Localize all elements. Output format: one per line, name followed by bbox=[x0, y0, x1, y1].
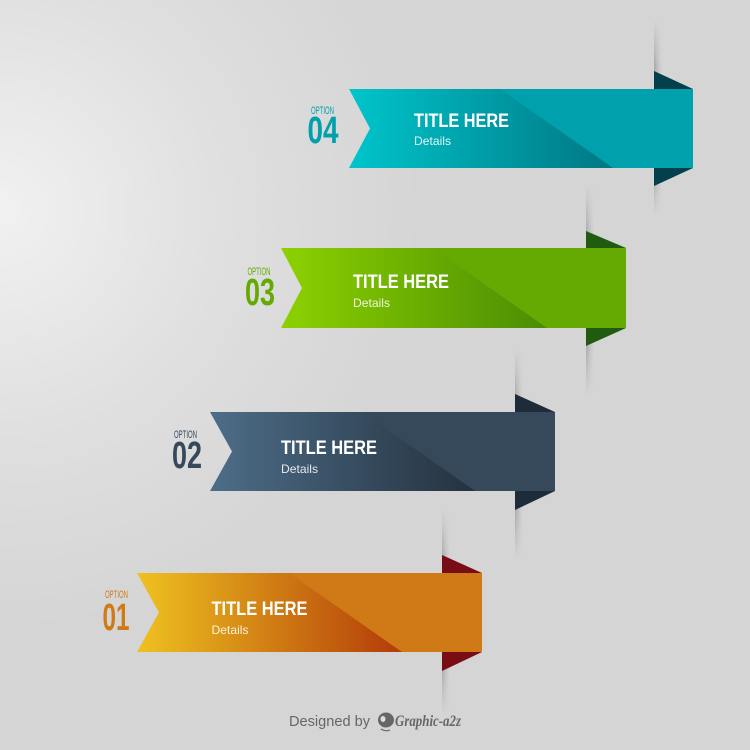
details 02: Details bbox=[281, 462, 318, 476]
ribbon: option 04 bbox=[308, 20, 693, 216]
number 02: 02 bbox=[172, 435, 202, 477]
band 02 bbox=[210, 412, 555, 491]
band 04 bbox=[349, 89, 693, 168]
band 01 bbox=[137, 573, 482, 652]
details 01: Details bbox=[212, 623, 248, 637]
top fold 01 bbox=[442, 555, 482, 573]
number 04: 04 bbox=[308, 110, 338, 152]
ribbon: option 02 bbox=[172, 350, 555, 560]
footer credit bbox=[289, 712, 462, 731]
bottom fold 03 bbox=[586, 328, 626, 346]
title 01: TITLE HERE bbox=[212, 598, 308, 620]
fold shadow 04 bbox=[654, 28, 660, 208]
band 03 bbox=[281, 248, 626, 328]
top fold 03 bbox=[586, 231, 626, 248]
title 02: TITLE HERE bbox=[281, 437, 377, 459]
top fold 02 bbox=[515, 394, 555, 412]
option label 01: OPTION bbox=[105, 589, 128, 601]
band overlay 03 bbox=[433, 248, 626, 328]
band overlay 01 bbox=[289, 573, 482, 652]
ribbon: option 01 bbox=[102, 510, 482, 715]
option label 04: OPTION bbox=[311, 105, 334, 117]
title 03: TITLE HERE bbox=[353, 271, 449, 293]
option label 02: OPTION bbox=[174, 429, 197, 441]
title 04: TITLE HERE bbox=[414, 110, 509, 132]
top fold 04 bbox=[654, 71, 693, 89]
details 03: Details bbox=[353, 296, 390, 310]
number 01: 01 bbox=[102, 597, 130, 639]
number 03: 03 bbox=[245, 272, 275, 314]
bottom fold 04 bbox=[654, 168, 693, 186]
ribbon: option 03 bbox=[245, 185, 626, 395]
band overlay 04 bbox=[500, 89, 693, 168]
bottom fold 02 bbox=[515, 491, 555, 510]
band overlay 02 bbox=[362, 412, 555, 491]
bottom fold 01 bbox=[442, 652, 482, 671]
brand name: Graphic-a2z bbox=[395, 713, 462, 730]
option label 03: OPTION bbox=[248, 266, 271, 278]
fold shadow 01 bbox=[442, 518, 448, 707]
designed by text: Designed by bbox=[289, 714, 371, 730]
fold shadow 03 bbox=[586, 194, 592, 386]
details 04: Details bbox=[414, 134, 451, 148]
icon: logo bbox=[378, 712, 394, 731]
fold shadow 02 bbox=[515, 358, 521, 551]
